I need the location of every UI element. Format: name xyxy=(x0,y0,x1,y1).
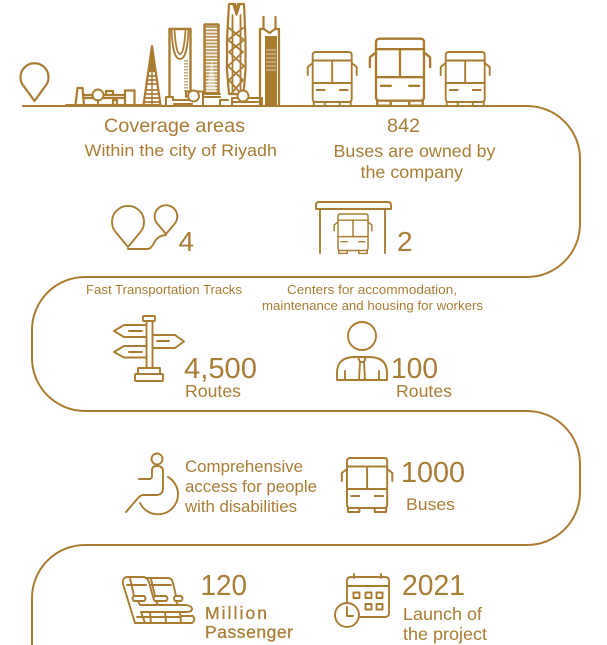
stat: 120 million passenger: Million xyxy=(205,603,267,623)
stat: 2021 launch of the project: Launch of xyxy=(403,604,482,624)
stat: 120 million passenger: Passenger xyxy=(205,622,293,642)
stat: 100 routes xyxy=(391,353,452,401)
icon: person xyxy=(337,322,387,380)
text: buses are owned by the company: the company xyxy=(360,162,463,182)
text: comprehensive access: access for people xyxy=(185,478,317,496)
text: buses are owned by the company: Buses are owned by xyxy=(334,141,496,161)
heading: coverage areas: Coverage areas xyxy=(104,115,245,137)
text: centers for accommodation: Centers for accommodation, xyxy=(287,282,457,297)
text: centers for accommodation xyxy=(262,282,484,313)
stat: 4,500 routes: 4,500 xyxy=(184,353,257,385)
stat: 1000 buses: 1000 xyxy=(401,457,465,489)
stat: 1000 buses xyxy=(401,457,465,514)
text: within the city of Riyadh: Within the city of Riyadh xyxy=(84,141,277,160)
icon: calendar and clock xyxy=(335,574,389,627)
icon: bus shelter xyxy=(316,202,391,253)
icon: signpost xyxy=(114,316,184,381)
stat: 2021 launch of the project xyxy=(402,570,487,644)
stat: 842: 842 xyxy=(387,115,420,137)
icon: two connected pins xyxy=(112,205,177,249)
stat: 2: 2 xyxy=(397,226,413,257)
text: centers for accommodation: maintenance and housing for workers xyxy=(262,298,484,313)
text: buses are owned by the company xyxy=(334,141,496,182)
stat: 4,500 routes: Routes xyxy=(185,381,241,401)
icon: location pin xyxy=(21,63,48,101)
winding route line xyxy=(22,106,580,645)
stat: 120 million passenger xyxy=(200,570,293,642)
icon: passenger seats xyxy=(123,577,194,623)
stat: 2021 launch of the project: the project xyxy=(403,624,487,644)
icon: Riyadh skyline xyxy=(66,4,279,105)
text: comprehensive access: Comprehensive xyxy=(185,458,303,476)
icon: three buses xyxy=(308,39,490,106)
text: comprehensive access: with disabilities xyxy=(184,498,297,516)
stat: 100 routes: 100 xyxy=(391,353,438,385)
text: fast transportation tracks: Fast Transportation Tracks xyxy=(86,282,242,297)
stat: 4: 4 xyxy=(178,226,194,257)
stat: 1000 buses: Buses xyxy=(406,495,455,514)
stat: 100 routes: Routes xyxy=(396,381,452,401)
icon: bus xyxy=(342,458,392,512)
text: comprehensive access xyxy=(184,458,317,516)
stat: 4,500 routes xyxy=(184,353,257,401)
stat: 120 million passenger: 120 xyxy=(200,570,247,602)
stat: 2021 launch of the project: 2021 xyxy=(402,570,465,602)
icon: wheelchair xyxy=(126,454,178,514)
